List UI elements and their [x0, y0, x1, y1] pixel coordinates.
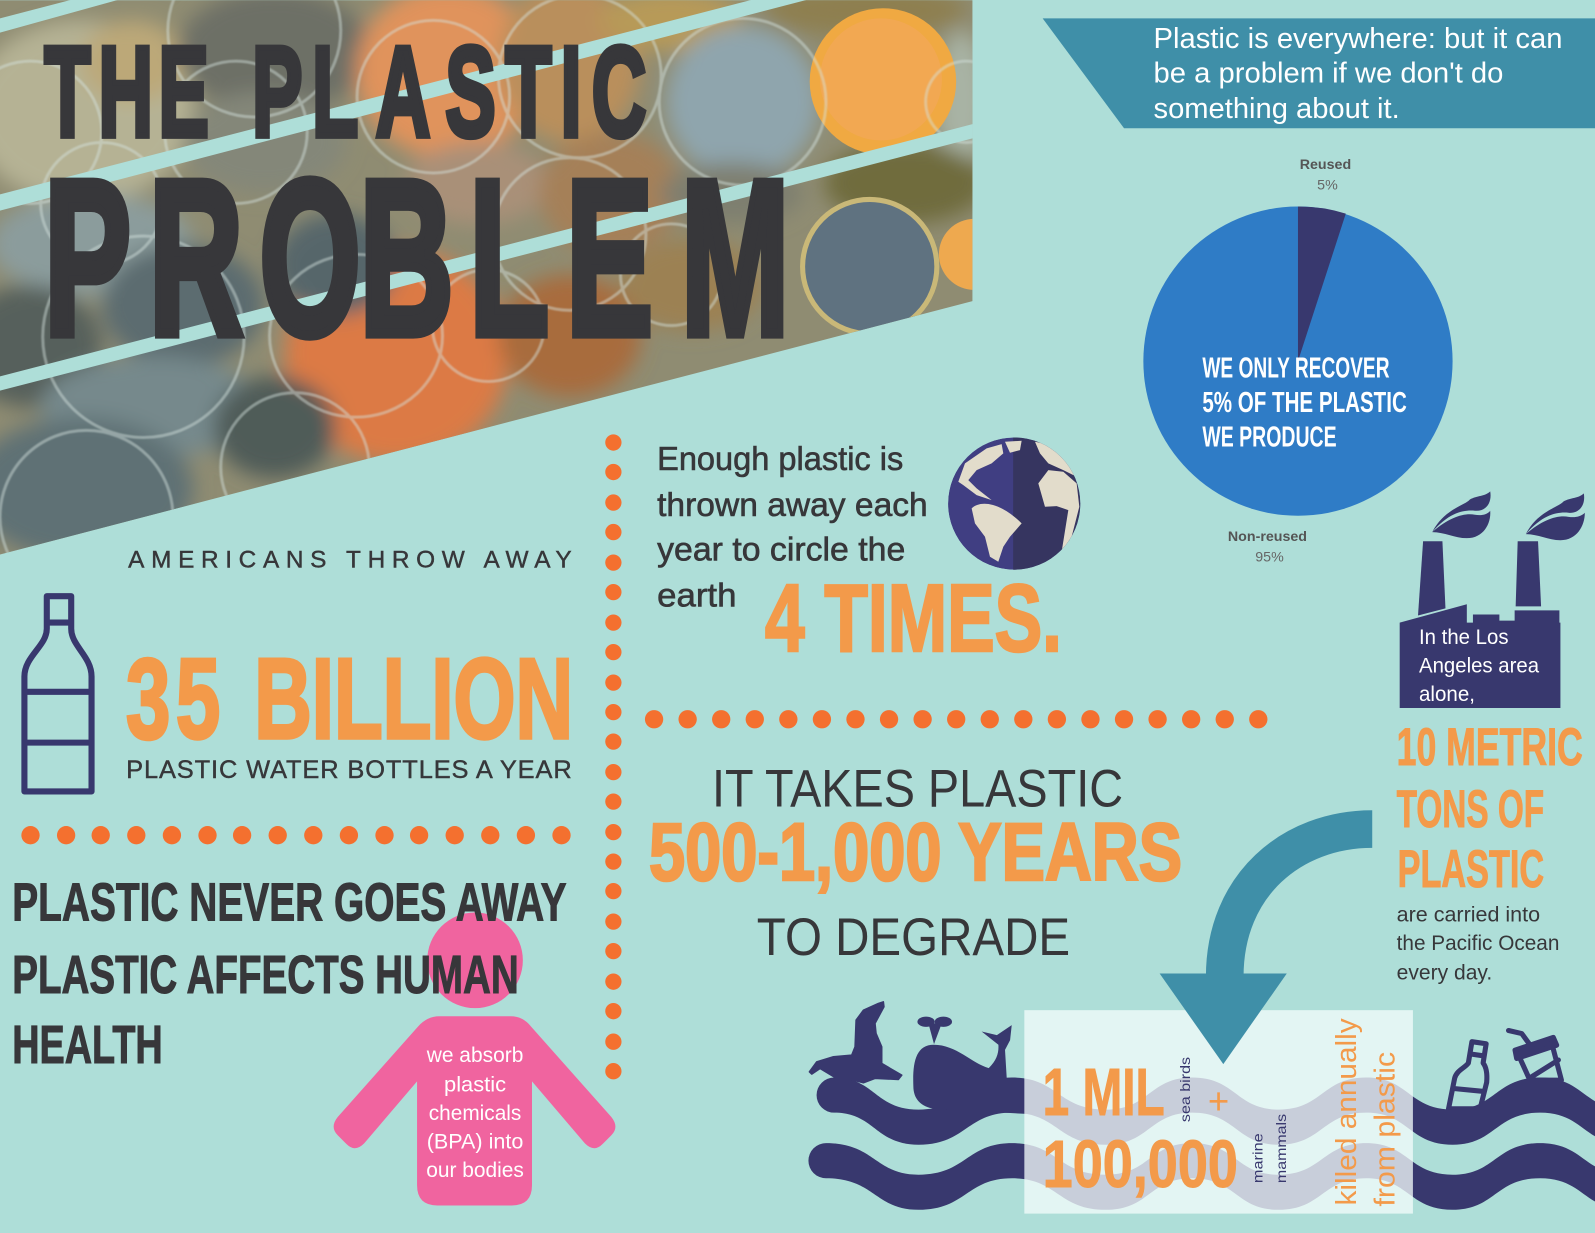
bottles statistic text: PLASTIC WATER BOTTLES A YEAR	[126, 756, 572, 784]
icon: factory	[1400, 491, 1585, 708]
wildlife killed statistic: 1 MIL	[1043, 1055, 1165, 1130]
metric tons statistic: every day.	[1397, 962, 1492, 985]
photo banner: plastic containers	[0, 0, 972, 554]
icon: cup litter	[1509, 1031, 1561, 1080]
earth statistic text: earth	[657, 577, 736, 614]
pie chart: plastic reuse	[1143, 157, 1453, 566]
white stat box	[1024, 1010, 1413, 1214]
wildlife killed statistic: mammals	[1274, 1114, 1290, 1183]
wildlife killed statistic: +	[1208, 1081, 1229, 1122]
banner: intro text: something about it.	[1154, 93, 1400, 125]
wildlife killed statistic: from plastic	[1370, 1052, 1402, 1206]
wildlife killed statistic: marine	[1250, 1133, 1266, 1183]
icon: pink person: we absorb	[426, 1043, 523, 1067]
factory caption	[1419, 626, 1539, 706]
icon: water bottle	[24, 596, 92, 791]
icon: pink person: our bodies	[426, 1158, 524, 1182]
wildlife killed statistic	[1043, 1018, 1402, 1206]
factory caption: In the Los	[1419, 626, 1509, 649]
plastic facts headings: HEALTH	[12, 1015, 163, 1075]
pie chart: plastic reuse: 5% OF THE PLASTIC	[1202, 387, 1407, 419]
title: PROBLEM	[44, 136, 789, 381]
title	[44, 21, 789, 381]
pie chart: plastic reuse: WE PRODUCE	[1202, 422, 1337, 454]
factory caption: Angeles area	[1419, 654, 1539, 677]
banner: intro text: be a problem if we don't do	[1154, 57, 1503, 89]
icon: whale	[913, 1017, 1026, 1114]
pie chart: plastic reuse: WE ONLY RECOVER	[1202, 352, 1390, 384]
icon: pink person	[334, 913, 615, 1205]
wildlife killed statistic: sea birds	[1178, 1057, 1194, 1122]
arrow: down to ocean	[1160, 829, 1372, 1064]
waves with marine animals and litter	[808, 1002, 1595, 1210]
earth statistic text: Enough plastic is	[657, 441, 903, 478]
wildlife killed statistic: killed annually	[1331, 1018, 1363, 1205]
icon: pink person: (BPA) into	[427, 1130, 523, 1154]
earth statistic text: 4 TIMES.	[765, 565, 1062, 672]
bottles statistic text	[126, 547, 573, 784]
banner: intro text: Plastic is everywhere: but it can	[1154, 23, 1562, 55]
plastic facts headings: PLASTIC AFFECTS HUMAN	[12, 945, 519, 1005]
horizontal dotted divider left	[21, 826, 571, 844]
pie chart: plastic reuse: 95%	[1255, 550, 1284, 566]
icon: bottle litter	[1449, 1042, 1487, 1109]
pie chart: plastic reuse: 5%	[1317, 177, 1338, 193]
icon: globe	[948, 437, 1084, 572]
upper wave	[817, 1078, 1595, 1145]
banner: intro text	[1043, 18, 1595, 128]
degrade statistic text: TO DEGRADE	[757, 908, 1070, 967]
bottles statistic text: AMERICANS THROW AWAY	[128, 547, 572, 574]
metric tons statistic: the Pacific Ocean	[1397, 932, 1559, 955]
earth statistic text: thrown away each	[657, 487, 928, 524]
icon: pink person: plastic	[444, 1073, 506, 1097]
title: THE PLASTIC	[44, 21, 646, 164]
pie chart: plastic reuse: Non-reused	[1228, 529, 1307, 545]
earth statistic text: year to circle the	[657, 532, 905, 569]
plastic facts headings: PLASTIC NEVER GOES AWAY	[12, 873, 567, 933]
icon: seal	[809, 1002, 902, 1083]
photo diagonal stripes	[0, 0, 972, 391]
lower wave	[808, 1143, 1595, 1210]
metric tons statistic: are carried into	[1397, 904, 1540, 927]
earth statistic text	[657, 441, 1062, 672]
metric tons statistic	[1397, 718, 1583, 985]
degrade statistic text: IT TAKES PLASTIC	[712, 760, 1123, 819]
horizontal dotted divider right	[645, 710, 1267, 728]
pie chart: plastic reuse: Reused	[1300, 157, 1351, 173]
vertical dotted divider	[605, 434, 622, 1079]
plastic facts headings	[12, 873, 567, 1075]
degrade statistic text: 500-1,000 YEARS	[649, 807, 1182, 898]
degrade statistic text	[649, 760, 1182, 967]
factory caption: alone,	[1419, 683, 1475, 706]
icon: pink person: chemicals	[429, 1101, 521, 1125]
bottles statistic text: 35 BILLION	[126, 635, 573, 762]
wildlife killed statistic: 100,000	[1043, 1127, 1238, 1202]
